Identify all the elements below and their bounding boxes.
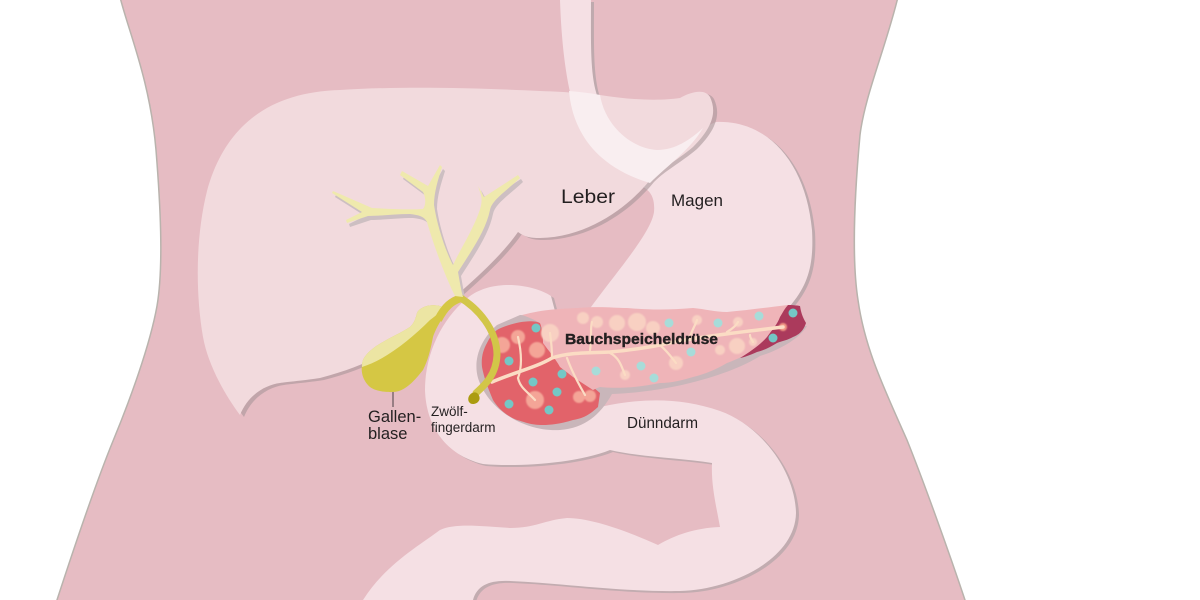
label: Zwölffingerdarm: fingerdarm (431, 420, 496, 435)
label: Gallenblase: blase (368, 425, 407, 443)
torso (56, 0, 966, 600)
pancreas tail (740, 305, 806, 358)
pancreas (476, 305, 807, 430)
stomach and oesophagus (560, 0, 815, 377)
label: Magen: Magen (671, 192, 723, 210)
label: Gallenblase: Gallen- (368, 408, 421, 426)
pancreatic islets (504, 308, 798, 414)
common bile duct (459, 297, 497, 393)
gallbladder (362, 305, 447, 392)
pancreas body (522, 305, 788, 390)
gallbladder and bile ducts (332, 165, 523, 407)
pancreas head (482, 321, 600, 425)
label: Dünndarm: Dünndarm (627, 415, 698, 432)
pancreatic lobules (494, 312, 787, 409)
duct connection (438, 298, 461, 320)
label: Bauchspeicheldrüse: Bauchspeicheldrüse (565, 331, 718, 348)
pancreatic duct (492, 320, 783, 400)
small intestine and duodenum (363, 285, 799, 600)
gallbladder over liver (362, 305, 447, 367)
label: Zwölffingerdarm: Zwölf- (431, 404, 468, 419)
bile duct tree (332, 165, 520, 297)
bile duct tip (468, 392, 480, 404)
pancreas shadow (476, 315, 807, 430)
label: Leber: Leber (561, 187, 616, 208)
liver (198, 88, 717, 417)
bile duct tree shadow (335, 169, 523, 301)
gallbladder pointer (392, 392, 394, 407)
